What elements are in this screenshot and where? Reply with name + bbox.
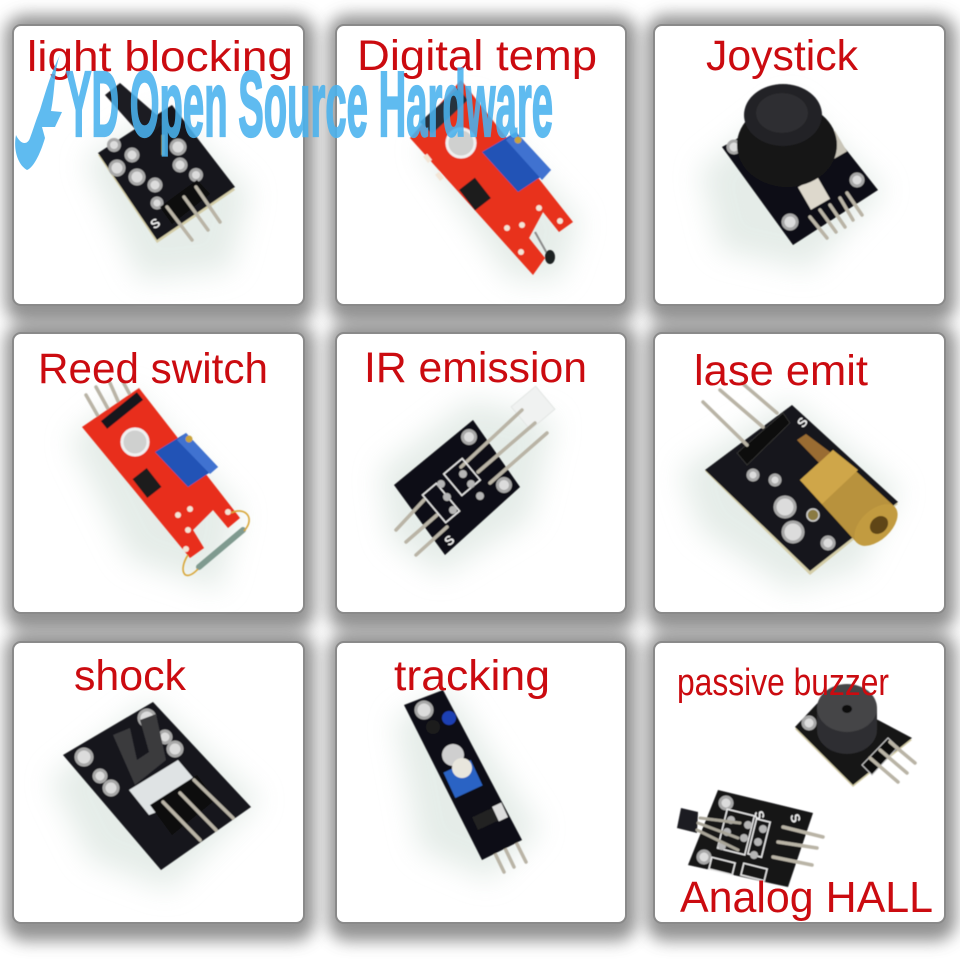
module: analog hall sensor: S [751,809,768,822]
label: light blocking: light blocking [27,33,293,81]
watermark: YD Open Source Hardware [15,52,553,170]
label: shock: shock [74,652,186,700]
label: lase emit: lase emit [694,347,868,395]
module: light blocking sensor: S [147,215,163,232]
panel: passive buzzer and analog hall [654,642,945,923]
module: analog hall sensor [677,790,823,887]
panel: shock [13,642,304,923]
module: tracking sensor [404,690,526,872]
label: tracking: tracking [394,652,550,700]
panel: reed switch [13,333,304,613]
module: analog hall sensor: S [787,812,804,825]
module: digital temperature sensor [410,80,573,275]
module: laser emitter [703,383,905,575]
module: passive buzzer [795,684,915,787]
label: reed switch: Reed switch [38,345,268,393]
module: IR emission [394,386,555,555]
module: reed switch [82,380,249,575]
module: laser emitter: S [794,414,811,430]
module: shock sensor [63,702,251,870]
panel: IR emission [336,333,626,613]
panel: lase emit [654,333,945,613]
module: light blocking sensor [98,83,235,243]
label: joystick: Joystick [706,32,858,80]
label: Analog HALL: Analog HALL [680,873,933,922]
icon: watermark swoosh [15,55,62,170]
label: digital temp: Digital temp [357,32,597,80]
panel: joystick [654,25,945,305]
module: IR emission: S [441,532,458,549]
panel: light blocking [13,25,304,305]
label: IR emission: IR emission [364,344,587,392]
panel: digital temp [336,25,626,305]
module: joystick [722,84,878,245]
panel: tracking [336,642,626,923]
label: passive buzzer: passive buzzer [677,662,889,704]
